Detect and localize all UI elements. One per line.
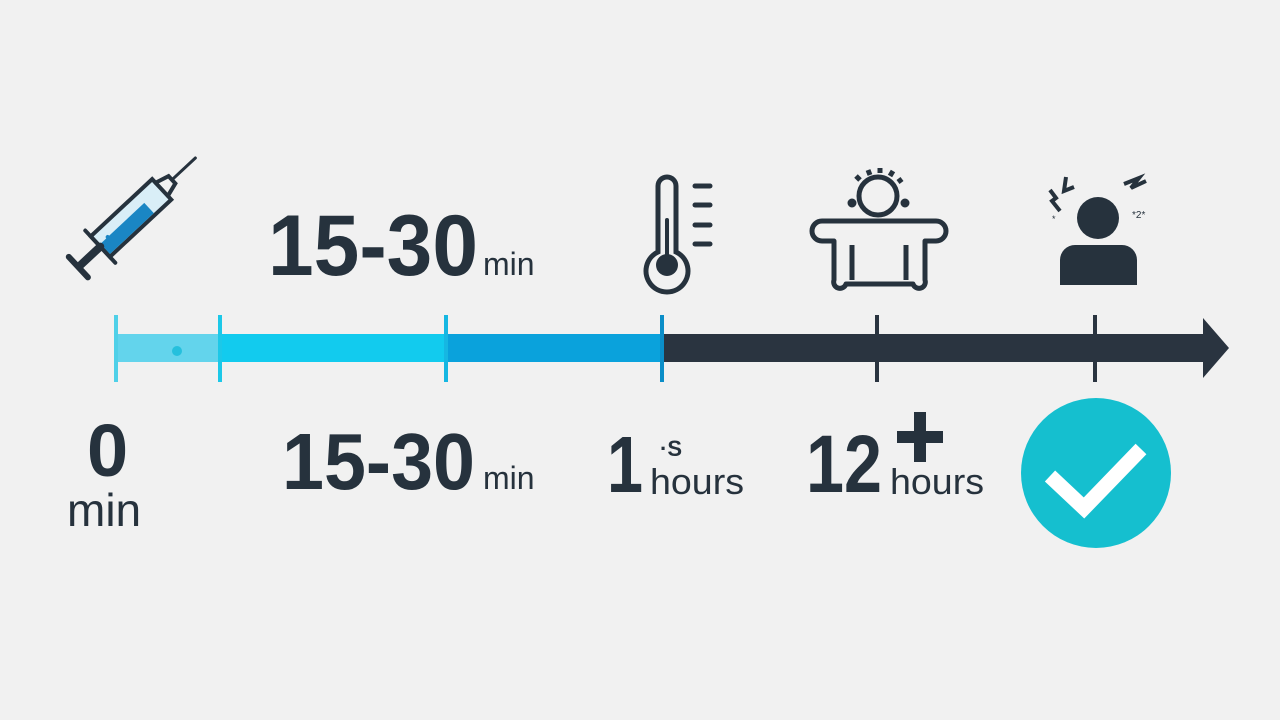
icon: person with rash [812,168,946,288]
label: 0 min: min [67,484,141,536]
label: 12+ hours: 12 [806,419,882,510]
label: 0 min: 0 [87,409,128,492]
label: 1 hours [607,420,744,509]
icon: syringe [63,142,210,283]
icon: headache person [1050,177,1146,285]
label: 0 min [67,409,141,536]
label: 12+ hours: hours [890,461,984,502]
icon: headache person: * [1052,214,1056,224]
heading: 15-30 min top: min [483,246,535,282]
label: 1 hours: 1 [607,420,643,509]
heading: 15-30 min top: 15-30 [268,198,478,294]
label: 1 hours: ·S [660,436,682,461]
timeline bar with arrow [114,315,1229,382]
label: 15-30 min: 15-30 [282,417,475,506]
label: 12+ hours [806,412,984,510]
label: 15-30 min: min [483,460,535,496]
icon: headache person: *2* [1132,210,1145,221]
label: 1 hours: hours [650,461,744,502]
icon: check circle [1021,398,1171,548]
icon: thermometer [646,177,710,292]
